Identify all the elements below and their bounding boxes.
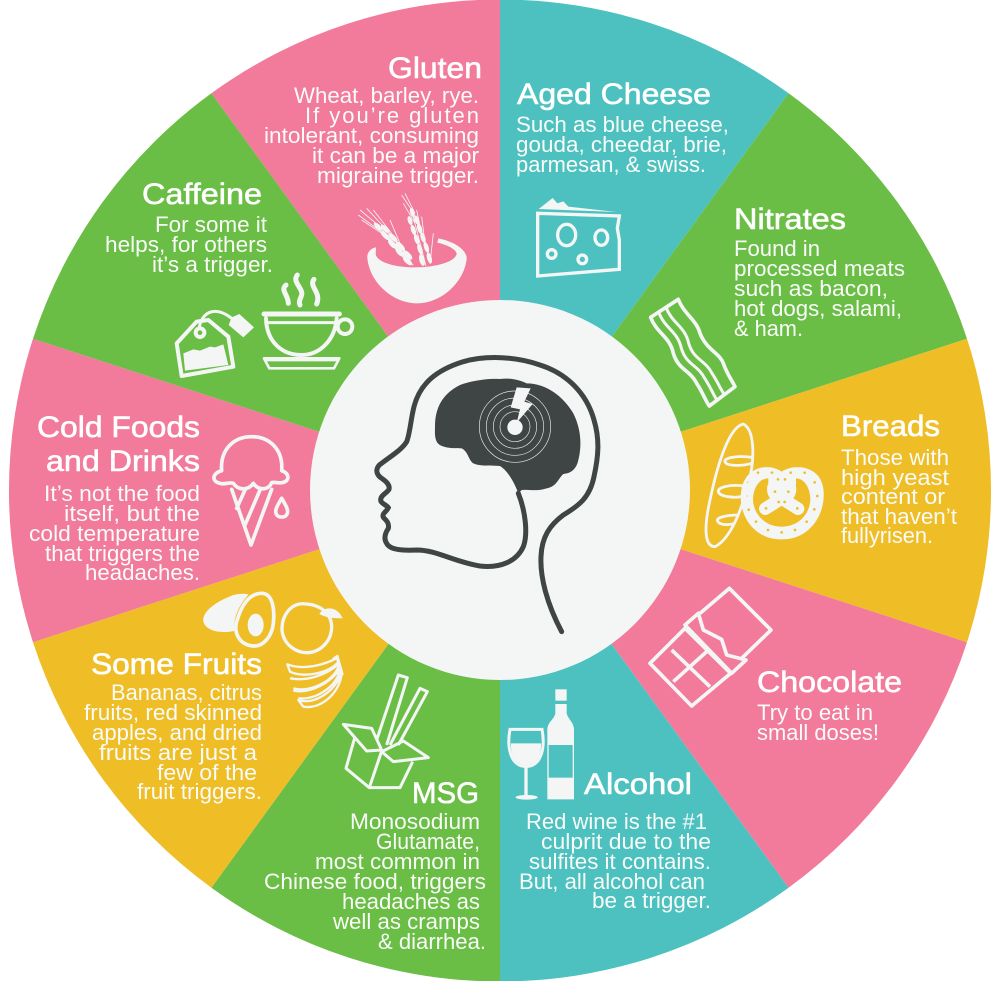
text: caffeine: it’s a trigger. [152, 252, 273, 277]
text: caffeine: helps, for others [105, 232, 267, 257]
text: nitrates: such as bacon, [734, 276, 888, 301]
icon: head with brain and lightning bolt [377, 358, 598, 632]
icon: ice cream cone [214, 437, 288, 545]
text: alcohol [519, 809, 711, 913]
text: gluten: it can be a major [312, 143, 479, 168]
text: alcohol: be a trigger. [592, 888, 711, 913]
text: msg: & diarrhea. [378, 929, 486, 954]
text: chocolate: small doses! [757, 720, 879, 745]
panel: caffeine [33, 93, 500, 491]
text: alcohol: sulfites it contains. [529, 849, 711, 874]
icon: wheat in bowl [358, 193, 467, 303]
heading: chocolate: Chocolate [757, 666, 902, 699]
text: cold foods and drinks: headaches. [85, 560, 200, 585]
panel: breads [500, 339, 991, 642]
text: breads: fullyrisen. [841, 523, 933, 548]
text: gluten: migraine trigger. [317, 163, 479, 188]
text: msg: well as cramps [332, 909, 480, 934]
text: msg [264, 809, 486, 954]
text: nitrates: Found in [734, 236, 820, 261]
text: some fruits [84, 680, 262, 804]
text: nitrates [734, 236, 905, 341]
text: some fruits: fruits, red skinned [84, 700, 262, 725]
text: alcohol: But, all alcohol can [519, 869, 705, 894]
text: some fruits: fruits are just a [99, 740, 258, 765]
text: aged cheese: Such as blue cheese, [516, 112, 729, 137]
panel: some fruits [33, 490, 500, 888]
text: cold foods and drinks: cold temperature [29, 521, 200, 546]
icon: cheese [538, 198, 619, 276]
text: some fruits: apples, and dried [92, 720, 262, 745]
heading: nitrates: Nitrates [734, 203, 846, 236]
heading: caffeine: Caffeine [142, 178, 262, 211]
text: nitrates: & ham. [734, 316, 803, 341]
heading: cold foods and drinks [37, 411, 200, 478]
text: msg: headaches as [342, 889, 480, 914]
icon: bacon [651, 299, 735, 406]
icon: avocado, apple, bananas [203, 593, 343, 707]
heading: cold foods and drinks: Cold Foods [37, 411, 200, 444]
text: caffeine [105, 212, 273, 277]
text: chocolate: Try to eat in [757, 700, 873, 725]
center circle [310, 300, 690, 680]
panel: msg [211, 490, 500, 981]
icon: wine glass and bottle [509, 689, 574, 800]
text: msg: Monosodium [350, 809, 480, 834]
panel: gluten [211, 0, 500, 490]
text: msg: Glutamate, [376, 829, 480, 854]
text: breads: high yeast [841, 465, 949, 490]
text: msg: Chinese food, triggers [264, 869, 486, 894]
panel: chocolate [500, 490, 967, 888]
text: nitrates: hot dogs, salami, [734, 296, 902, 321]
text: aged cheese: parmesan, & swiss. [516, 152, 706, 177]
heading: gluten: Gluten [388, 52, 482, 85]
panel: alcohol [500, 490, 789, 981]
text: breads: that haven’t [841, 504, 957, 529]
panel: nitrates [500, 93, 967, 491]
text: gluten: intolerant, consuming [264, 123, 479, 148]
text: gluten: Wheat, barley, rye. [294, 83, 479, 108]
heading: msg: MSG [412, 777, 479, 810]
icon: baguette and pretzel [706, 424, 824, 547]
text: aged cheese: gouda, cheedar, brie, [516, 132, 727, 157]
text: msg: most common in [315, 849, 480, 874]
text: cold foods and drinks: itself, but the [64, 501, 200, 526]
icon: tea bag and cup [177, 275, 352, 376]
text: some fruits: few of the [157, 760, 257, 785]
text: some fruits: fruit triggers. [137, 779, 262, 804]
text: gluten [264, 83, 479, 188]
icon: takeout box and chopsticks [343, 675, 428, 788]
text: breads: content or [841, 484, 945, 509]
heading: alcohol: Alcohol [584, 768, 692, 801]
text: alcohol: Red wine is the #1 [526, 809, 707, 834]
text: nitrates: processed meats [734, 256, 905, 281]
heading: cold foods and drinks: and Drinks [46, 445, 200, 478]
text: some fruits: Bananas, citrus [111, 680, 262, 705]
heading: breads: Breads [841, 410, 940, 443]
icon: chocolate bar [650, 588, 771, 706]
text: chocolate [757, 700, 879, 745]
text: caffeine: For some it [155, 212, 267, 237]
text: cold foods and drinks: It’s not the food [44, 481, 200, 506]
text: cold foods and drinks: that triggers the [45, 541, 200, 566]
heading: aged cheese: Aged Cheese [517, 78, 711, 111]
text: aged cheese [516, 112, 729, 177]
text: alcohol: culprit due to the [541, 829, 711, 854]
panel: aged cheese [500, 0, 789, 490]
text: cold foods and drinks [29, 481, 200, 585]
text: gluten: If you’re gluten [305, 103, 479, 128]
text: breads: Those with [841, 445, 949, 470]
panel: cold foods and drinks [9, 339, 500, 642]
text: breads [841, 445, 957, 548]
heading: some fruits: Some Fruits [91, 648, 262, 681]
